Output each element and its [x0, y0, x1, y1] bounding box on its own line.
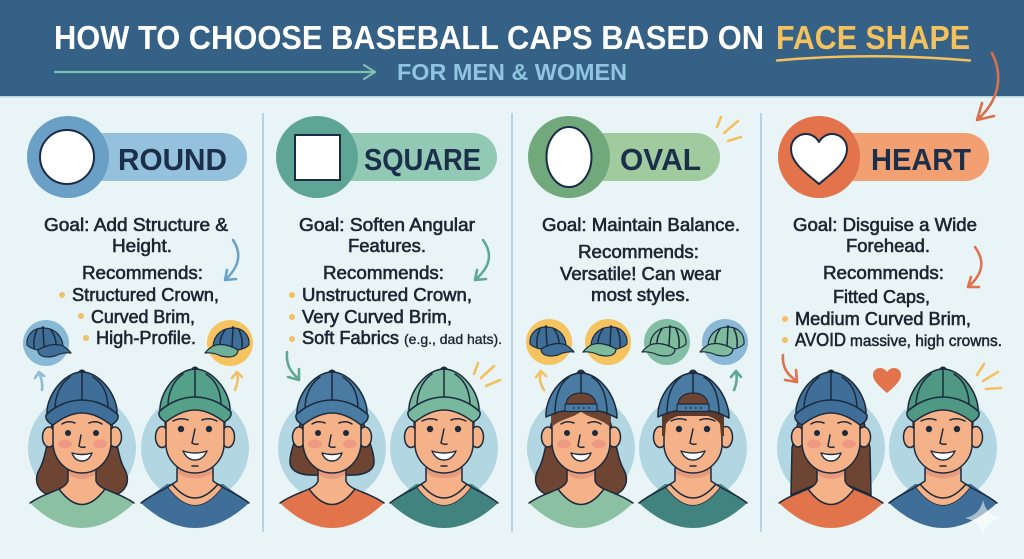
text: round goal and recommendations: Recommends:: [82, 263, 203, 283]
badge: square: SQUARE: [364, 142, 481, 177]
watermark sparkle: [965, 500, 1001, 536]
panel: round: [23, 116, 253, 528]
sparks: square: [474, 363, 500, 386]
person: oval man: [639, 370, 747, 528]
text: round goal and recommendations: [44, 215, 228, 348]
arrow: up yellow oval: [536, 371, 546, 390]
arrow: up green oval: [731, 371, 741, 390]
title underline: [777, 56, 970, 60]
text: square goal and recommendations: Features.: [348, 236, 426, 256]
badge: oval: OVAL: [620, 142, 701, 177]
arrow: up yellow: [232, 372, 242, 390]
person: square woman: [278, 370, 386, 528]
person: round woman: [28, 370, 136, 528]
text: oval goal and recommendations: Recommends:: [578, 242, 699, 262]
arrow from title to heart panel: [977, 53, 998, 120]
text: heart goal and recommendations: Medium Curved Brim,: [795, 309, 971, 329]
icon: blue cap: [23, 320, 71, 366]
text: heart goal and recommendations: AVOID: [795, 330, 846, 350]
title: HOW TO CHOOSE BASEBALL CAPS BASED ON: [54, 19, 764, 56]
badge: heart: [778, 116, 989, 198]
subtitle: FOR MEN & WOMEN: [397, 59, 627, 85]
arrow: round: [225, 240, 238, 280]
text: square goal and recommendations: [289, 215, 502, 348]
arrow: up blue: [35, 372, 44, 390]
person: heart man: [889, 368, 997, 528]
arrow: square upper: [475, 240, 489, 280]
person: square man: [390, 368, 498, 528]
text: oval goal and recommendations: most styles.: [591, 285, 690, 305]
icon: cap on green: [642, 319, 690, 365]
text: heart goal and recommendations: Recommends:: [823, 263, 944, 283]
person: oval woman: [527, 370, 635, 528]
badge: heart: HEART: [871, 142, 971, 177]
text: heart goal and recommendations: [782, 215, 1002, 350]
arrow: heart lower: [783, 355, 797, 382]
badge: oval: [528, 116, 720, 198]
text: oval goal and recommendations: Versatile! Can wear: [560, 264, 721, 284]
text: round goal and recommendations: Height.: [112, 236, 172, 256]
icon: heart: [873, 368, 901, 393]
panel: oval: [526, 116, 748, 528]
text: heart goal and recommendations: massive, high crowns.: [850, 333, 1002, 350]
icon: cap on blue: [700, 319, 748, 365]
text: square goal and recommendations: Unstructured Crown,: [302, 285, 472, 305]
person: heart woman: [777, 370, 885, 528]
arrow: heart upper: [968, 247, 981, 287]
badge: round: [27, 116, 247, 198]
text: oval goal and recommendations: [542, 215, 740, 305]
arrow: square lower: [287, 352, 299, 380]
header band: [0, 0, 1024, 98]
text: round goal and recommendations: Curved Brim,: [91, 307, 195, 327]
text: round goal and recommendations: Goal: Add Structure &: [44, 215, 228, 235]
header arrow: [55, 65, 375, 79]
text: oval goal and recommendations: Goal: Maintain Balance.: [542, 215, 740, 235]
panel: square: [276, 116, 502, 528]
text: heart goal and recommendations: Forehead.: [846, 236, 930, 256]
title: FACE SHAPE: [776, 19, 970, 56]
text: square goal and recommendations: Very Curved Brim,: [302, 307, 452, 327]
icon: green-brim cap: [205, 320, 253, 366]
text: heart goal and recommendations: Fitted Caps,: [833, 287, 930, 307]
sparks: heart: [977, 364, 1001, 389]
text: square goal and recommendations: (e.g., dad hats).: [404, 331, 502, 347]
icon: cap on yellow 1: [526, 319, 574, 365]
text: round goal and recommendations: High-Profile.: [96, 328, 196, 348]
icon: cap on yellow 2: [583, 319, 631, 365]
sparks: oval badge: [717, 117, 741, 141]
text: square goal and recommendations: Goal: Soften Angular: [299, 215, 475, 235]
badge: round: ROUND: [118, 142, 227, 177]
text: square goal and recommendations: Soft Fabrics: [302, 328, 399, 348]
text: round goal and recommendations: Structured Crown,: [72, 285, 219, 305]
person: round man: [141, 368, 249, 528]
panel: heart: [777, 116, 1002, 528]
text: square goal and recommendations: Recommends:: [323, 263, 444, 283]
badge: square: [276, 116, 497, 198]
text: heart goal and recommendations: Goal: Disguise a Wide: [793, 215, 977, 235]
